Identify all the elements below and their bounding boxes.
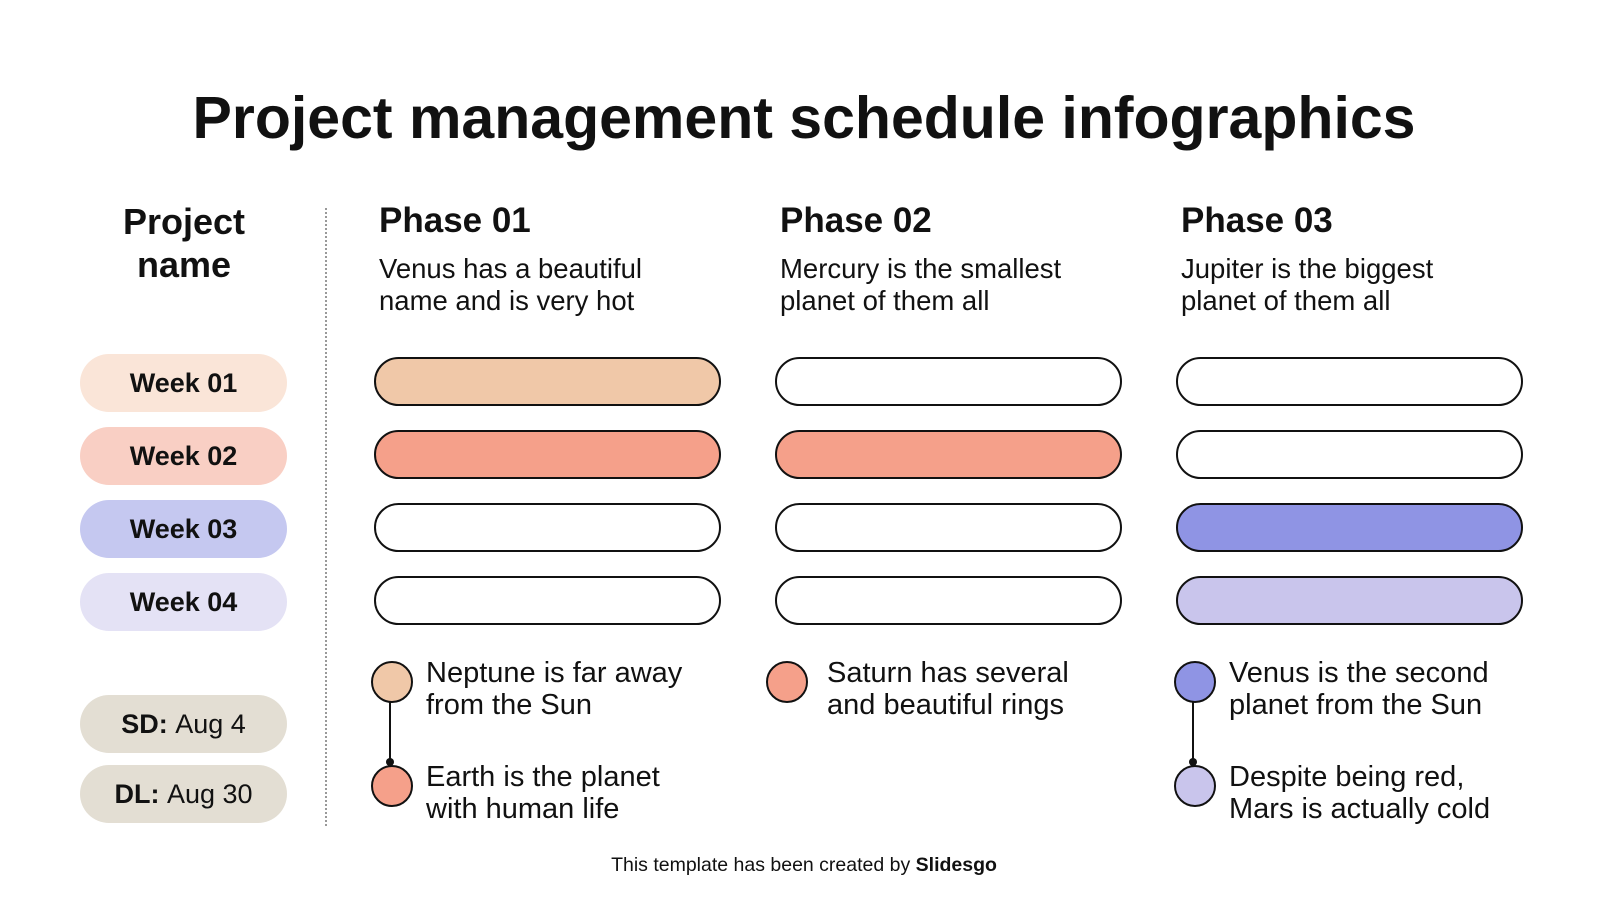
week 01: Week 01	[130, 368, 237, 398]
legend text: Saturn has several	[827, 657, 1069, 689]
phase 03 description: Jupiter is the biggest	[1181, 253, 1433, 284]
project name heading: Project	[123, 201, 245, 242]
legend text 2: with human life	[426, 793, 619, 825]
legend phase 01	[371, 657, 682, 825]
deadline: Aug 30	[167, 778, 253, 808]
phase 03 description	[1181, 253, 1434, 316]
phase 01 description	[379, 253, 642, 316]
legend text 1	[426, 657, 682, 721]
legend text: and beautiful rings	[827, 689, 1064, 721]
phase 01 description: name and is very hot	[379, 285, 634, 316]
legend text 2: Mars is actually cold	[1229, 793, 1490, 825]
week 01	[80, 354, 287, 412]
legend text 1: Venus is the second	[1229, 657, 1489, 689]
legend text 1: from the Sun	[426, 689, 592, 721]
legend text 2: Despite being red,	[1229, 761, 1464, 793]
week pills	[80, 354, 287, 631]
legend text 2	[1229, 761, 1490, 825]
week 02: Week 02	[130, 440, 237, 470]
legend text 2	[426, 761, 660, 825]
phase 03 description: planet of them all	[1181, 285, 1390, 316]
deadline: DL:	[114, 778, 159, 808]
phase 01 heading: Phase 01	[379, 201, 531, 240]
project name heading: name	[137, 244, 231, 285]
icon: lavender circle	[1174, 765, 1216, 807]
week 04: Week 04	[130, 586, 237, 616]
phase 02 description: Mercury is the smallest	[780, 253, 1061, 284]
legend text 2: Earth is the planet	[426, 761, 660, 793]
week 02	[80, 427, 287, 485]
start date: SD:	[121, 708, 168, 738]
legend text 1: Neptune is far away	[426, 657, 682, 689]
start date	[80, 695, 287, 753]
legend phase 03	[1174, 657, 1490, 825]
legend text 1	[1229, 657, 1489, 721]
legend text	[827, 657, 1069, 721]
phase 02 heading: Phase 02	[780, 201, 932, 240]
icon: salmon circle	[766, 661, 808, 703]
deadline	[80, 765, 287, 823]
phase 01 column	[374, 201, 721, 625]
week 03: Week 03	[130, 514, 237, 544]
phase 03 heading: Phase 03	[1181, 201, 1333, 240]
phase 01 description: Venus has a beautiful	[379, 253, 642, 284]
week 04	[80, 573, 287, 631]
project name heading	[123, 201, 245, 285]
phase 02 description	[780, 253, 1061, 316]
phase 02 description: planet of them all	[780, 285, 989, 316]
phase 02 column	[775, 201, 1122, 625]
start date: Aug 4	[175, 708, 246, 738]
title: Project management schedule infographics	[193, 85, 1415, 151]
bars	[374, 357, 721, 406]
icon: salmon circle	[371, 765, 413, 807]
phase 03 column	[1176, 201, 1523, 625]
icon: purple circle	[1174, 661, 1216, 703]
legend phase 02	[766, 657, 1069, 721]
icon: peach circle	[371, 661, 413, 703]
week 03	[80, 500, 287, 558]
legend text 1: planet from the Sun	[1229, 689, 1482, 721]
footer credit: This template has been created by Slidesgo	[611, 854, 997, 876]
